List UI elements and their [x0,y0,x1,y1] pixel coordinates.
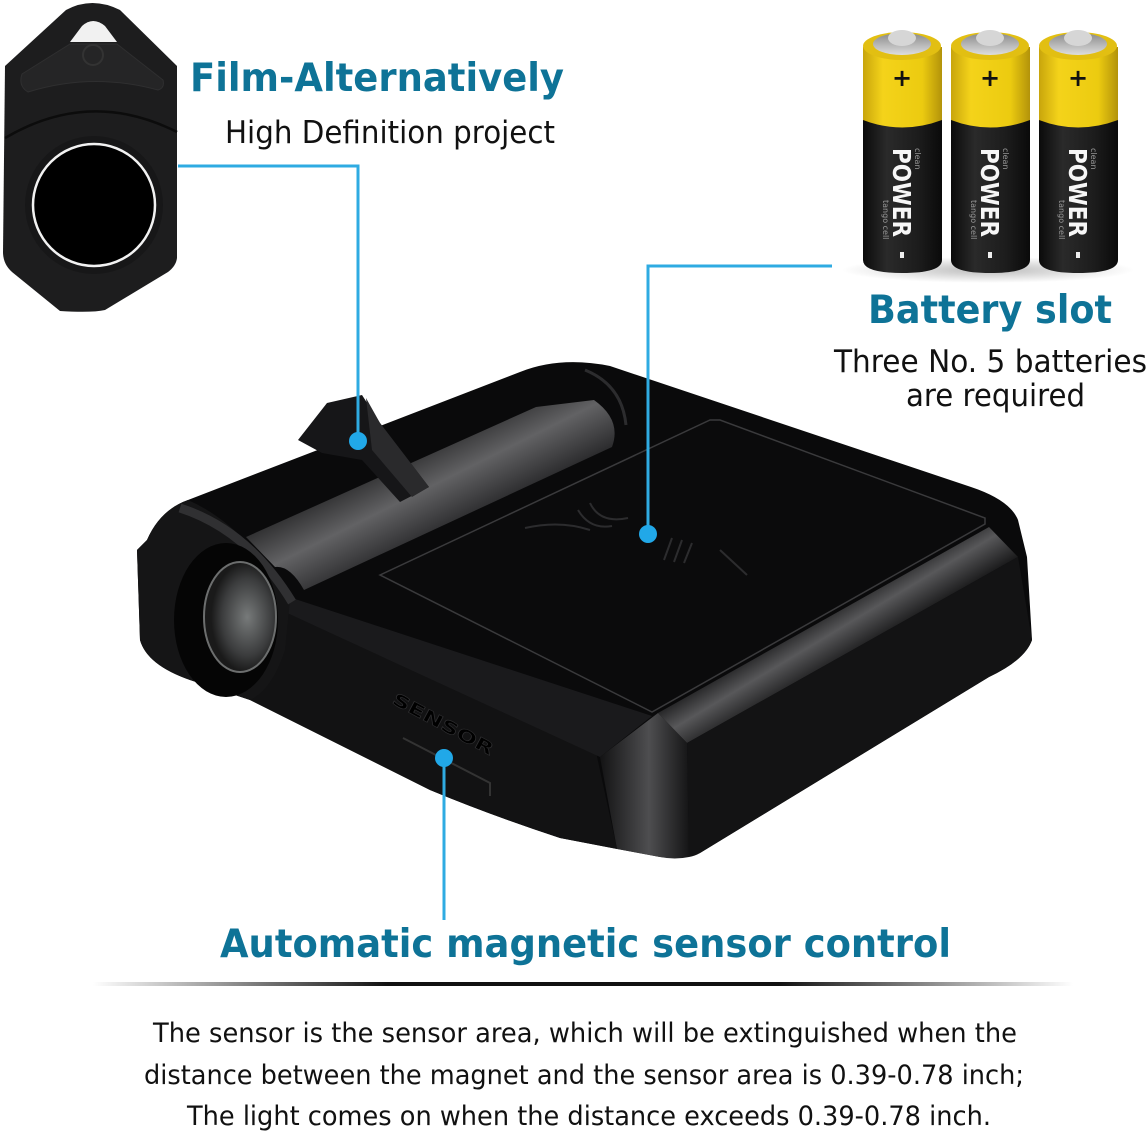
battery 3: POWER [1063,148,1092,237]
icon: projector film key [3,3,177,312]
battery cover [380,420,985,712]
battery 3 [1039,30,1118,273]
battery 3: clean [1089,148,1098,170]
heading: sensor control: Automatic magnetic sensor control [220,921,951,967]
right side face [687,557,1032,857]
projector roller [246,400,615,590]
battery 1: + [892,64,912,92]
battery 2 [951,30,1030,273]
battery 2: + [980,64,1000,92]
battery 2: clean [1001,148,1010,170]
text: sensor description: distance between the magnet and the sensor area is 0.39-0.78 inch; [144,1060,1024,1091]
device body [137,362,1032,858]
heading: film: Film-Alternatively [190,55,564,101]
text: battery description [833,344,1147,414]
battery 1: clean [913,148,922,170]
text: film description: High Definition project [225,115,555,151]
icon: three batteries [842,30,1134,283]
lens [174,543,278,697]
battery 3: + [1068,64,1088,92]
illustration: black projector device [137,362,1032,858]
side sensor panel [250,612,617,849]
battery 1: POWER [887,148,916,237]
heading: battery slot: Battery slot [868,287,1112,333]
glossy corner [600,713,689,858]
connector: battery line [639,266,832,543]
film lever [298,395,429,502]
cover emblem [525,503,747,575]
battery 2: tango cell [969,200,978,239]
battery 1: tango cell [881,200,890,239]
sensor label: SENSOR [389,690,497,760]
battery 3: tango cell [1057,200,1066,239]
connector: sensor line [435,749,453,920]
glossy top edge band [658,527,1018,743]
text: sensor description: The light comes on when the distance exceeds 0.39-0.78 inch. [186,1101,991,1132]
text: sensor description [144,1018,1024,1132]
text: battery description: are required [906,378,1085,414]
lens housing [137,500,290,700]
battery 2: POWER [975,148,1004,237]
battery 1 [863,30,942,273]
text: sensor description: The sensor is the sensor area, which will be extinguished when the [152,1018,1017,1049]
connector: film line [178,166,367,450]
